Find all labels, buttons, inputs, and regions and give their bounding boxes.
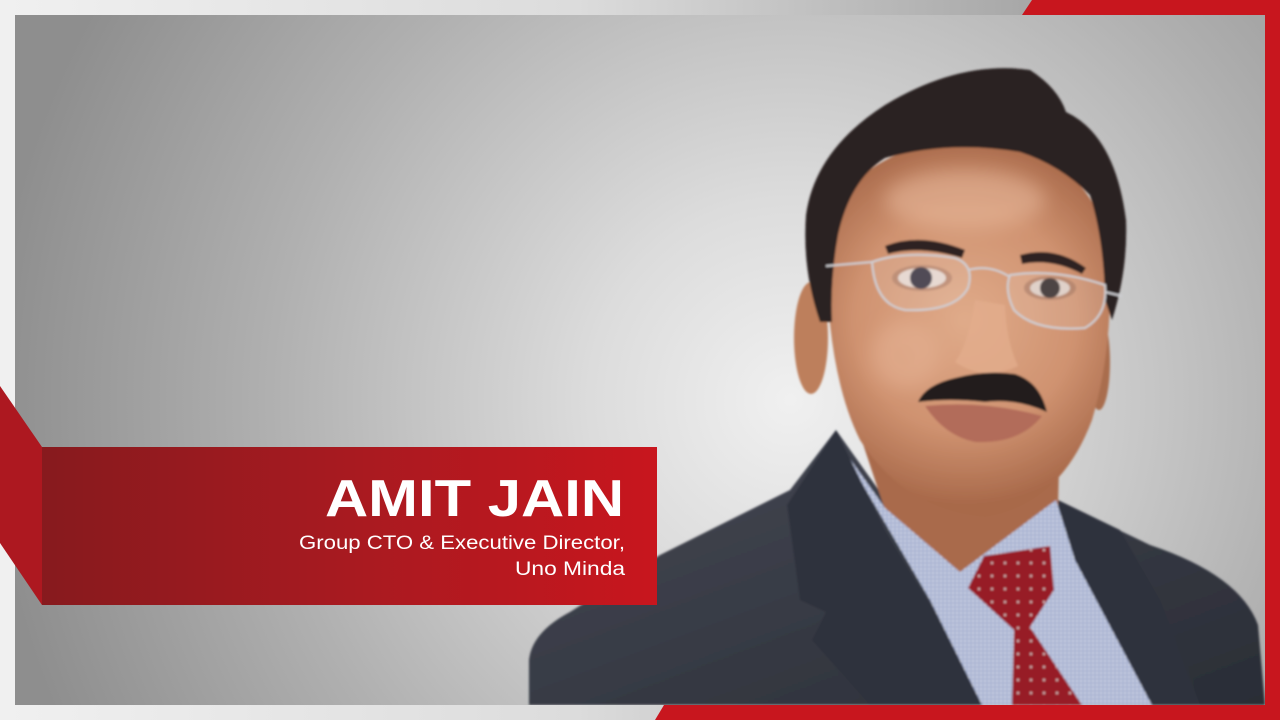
- ear left: [794, 282, 828, 394]
- hair: [805, 68, 1126, 322]
- portrait: man in suit: [529, 68, 1265, 705]
- red frame accents: [655, 0, 1280, 720]
- forehead highlight: [885, 170, 1045, 230]
- job title: Group CTO & Executive Director,: [299, 533, 625, 554]
- cheek highlight: [871, 324, 934, 389]
- left eye: [892, 265, 952, 291]
- mouth: [925, 404, 1042, 442]
- right lapel: [1058, 500, 1200, 705]
- neck: [862, 445, 1060, 573]
- suit jacket: [529, 430, 1265, 705]
- shirt: [838, 442, 1152, 705]
- moustache: [918, 373, 1047, 412]
- red banner fold: [0, 386, 42, 605]
- jacket lapel: [788, 430, 918, 621]
- face: [826, 140, 1110, 517]
- right eye: [1024, 276, 1076, 300]
- ear right: [1094, 335, 1112, 412]
- name banner: [42, 447, 657, 605]
- right eyebrow: [1020, 252, 1086, 274]
- tie: [968, 546, 1082, 705]
- glasses: [826, 255, 1122, 329]
- nose: [958, 306, 1017, 374]
- company: Uno Minda: [515, 559, 626, 580]
- name: AMIT JAIN: [325, 470, 624, 528]
- left eyebrow: [885, 240, 965, 258]
